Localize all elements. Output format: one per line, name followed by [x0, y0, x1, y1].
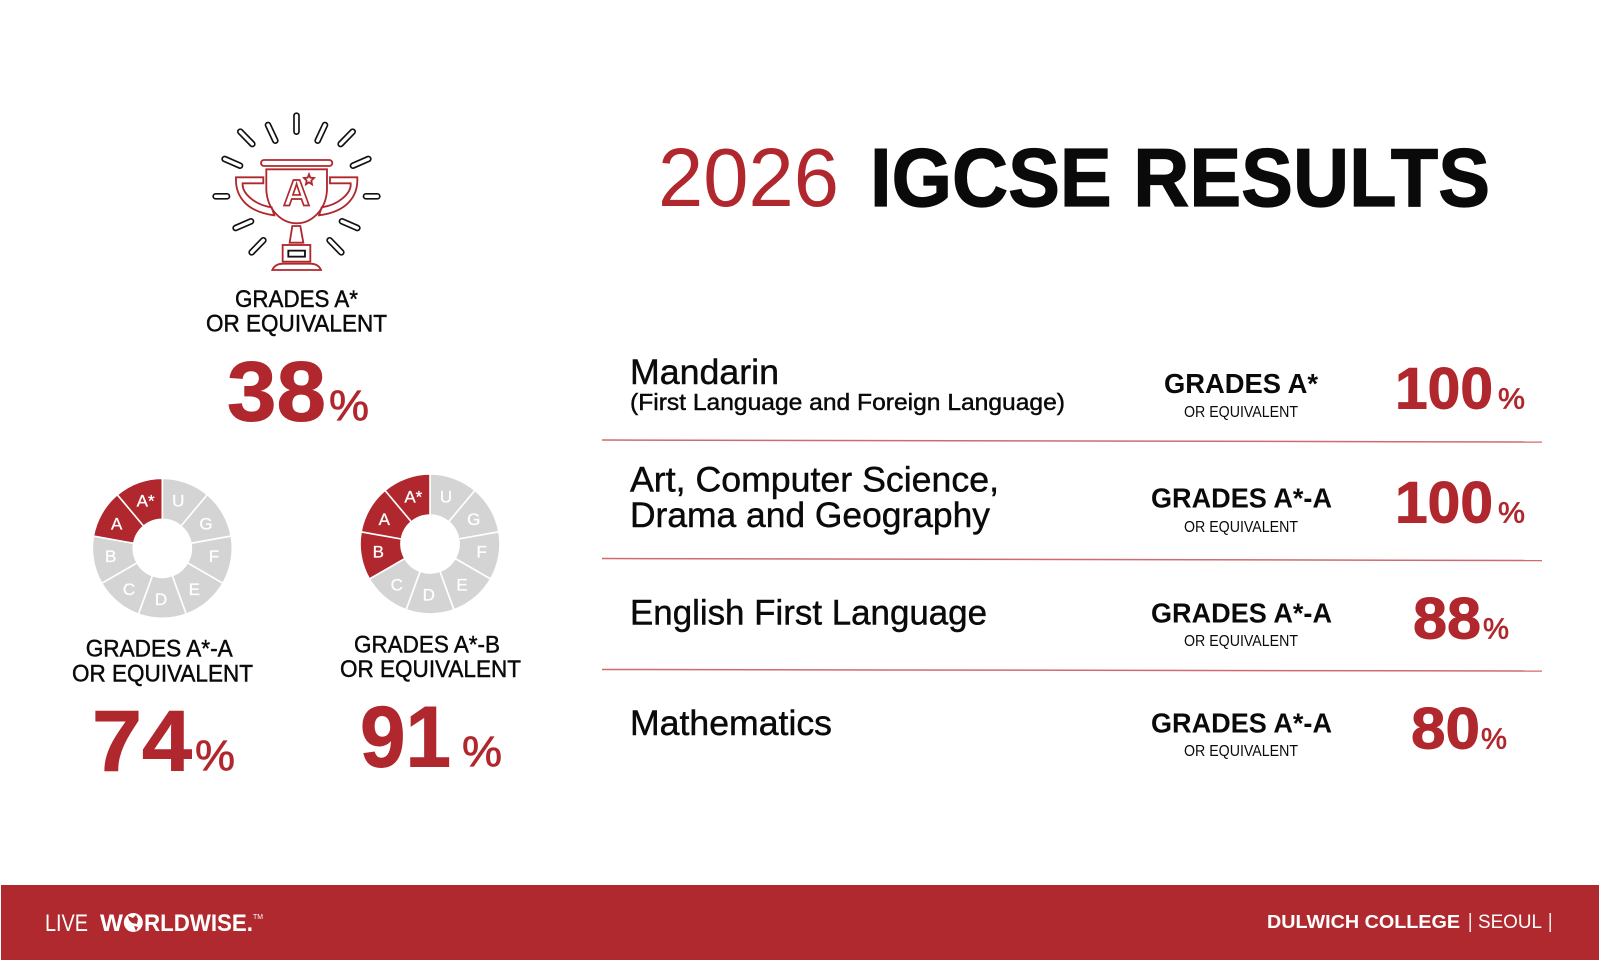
subject row: English First Language: % — [1483, 614, 1509, 646]
subject row: Art, Computer Science, Drama and Geography: Art, Computer Science, — [630, 461, 999, 500]
subject row: English First Language: 88 — [1413, 586, 1481, 652]
donut chart: grades A*-A: B — [105, 547, 116, 566]
footer: Live Worldwise logo: RLDWISE. — [144, 910, 253, 937]
stat: 38%: % — [329, 382, 369, 430]
footer: Live Worldwise logo — [45, 910, 263, 937]
subject row: Mathematics — [630, 696, 1507, 762]
footer: Live Worldwise logo: O — [125, 910, 142, 937]
subject row: Mandarin: OR EQUIVALENT — [1184, 404, 1298, 421]
donut chart: grades A*-A: D — [155, 590, 167, 609]
footer band — [1, 885, 1599, 960]
title: 2026 — [658, 131, 839, 224]
subject row: Mandarin — [630, 353, 1525, 422]
footer: Dulwich College Seoul logo — [1267, 911, 1551, 933]
donut chart: grades A*-A: C — [123, 580, 135, 599]
subject row: English First Language: English First Language — [630, 594, 987, 632]
subject row: English First Language: OR EQUIVALENT — [1184, 633, 1298, 650]
donut chart: grades A*-A: E — [189, 580, 200, 599]
heading: grades A*-A — [72, 636, 253, 688]
donut chart: grades A*-B: D — [423, 586, 435, 605]
subject row: Art, Computer Science, Drama and Geography: % — [1498, 498, 1525, 530]
heading: grades A*: OR EQUIVALENT — [206, 310, 387, 338]
footer: Dulwich College Seoul logo: SEOUL — [1478, 912, 1542, 933]
donut chart: grades A*-B: G — [467, 510, 480, 529]
donut chart: grades A*-A — [92, 478, 232, 618]
donut chart: grades A*-B: U — [440, 487, 452, 506]
subject row: Mathematics: 80 — [1411, 696, 1480, 762]
icon: trophy with rays: A — [283, 172, 310, 214]
donut chart: grades A*-A: F — [209, 547, 219, 566]
heading: grades A* — [206, 286, 387, 338]
subject row: Art, Computer Science, Drama and Geography: OR EQUIVALENT — [1184, 519, 1298, 536]
heading: grades A*-B: GRADES A*-B — [354, 632, 500, 659]
subject row: Art, Computer Science, Drama and Geography — [630, 461, 1525, 536]
donut chart: grades A*-B: A — [379, 510, 391, 529]
stat: 91% — [360, 690, 502, 786]
donut chart: grades A*-A: U — [172, 492, 184, 511]
stat: 91%: 91 — [360, 690, 451, 786]
subject row: Mathematics: OR EQUIVALENT — [1184, 743, 1298, 760]
subject row: English First Language: GRADES A*-A — [1151, 597, 1332, 628]
subject row: Art, Computer Science, Drama and Geography: GRADES A*-A — [1151, 483, 1332, 514]
stat: 91%: % — [462, 729, 502, 777]
subject row: Mathematics: Mathematics — [630, 704, 832, 743]
subject row: English First Language — [630, 586, 1509, 652]
heading: grades A*-A: GRADES A*-A — [86, 636, 233, 663]
footer: Dulwich College Seoul logo: DULWICH COLLEGE — [1267, 911, 1460, 932]
subject row: Mandarin: % — [1498, 384, 1525, 416]
subject row: Mandarin: 100 — [1395, 356, 1493, 422]
heading: grades A*-B — [340, 632, 521, 683]
footer: Live Worldwise logo: W — [100, 910, 123, 937]
stat: 74% — [92, 694, 235, 790]
subject row: Mandarin: (First Language and Foreign Language) — [630, 389, 1065, 415]
donut chart: grades A*-A: G — [199, 514, 213, 533]
heading: grades A*-B: OR EQUIVALENT — [340, 656, 521, 683]
subject row: Mandarin: Mandarin — [630, 353, 779, 392]
donut chart: grades A*-B: A* — [404, 487, 423, 506]
subject row: Mathematics: % — [1481, 724, 1507, 756]
subject row: Mandarin: GRADES A* — [1164, 368, 1318, 399]
stat: 38%: 38 — [227, 344, 326, 438]
donut chart: grades A*-B: C — [391, 576, 403, 595]
footer: Live Worldwise logo: TM — [253, 914, 263, 921]
heading: grades A*-A: OR EQUIVALENT — [72, 660, 253, 688]
stat: 74%: 74 — [92, 694, 192, 790]
donut chart: grades A*-A: A — [111, 514, 123, 533]
donut chart: grades A*-B — [360, 474, 500, 614]
icon: trophy with rays — [216, 116, 377, 270]
footer: Live Worldwise logo: LIVE — [45, 910, 88, 937]
subject row: Art, Computer Science, Drama and Geography: Drama and Geography — [630, 496, 990, 535]
subject row: Art, Computer Science, Drama and Geography: 100 — [1395, 470, 1493, 536]
subject row: Mathematics: GRADES A*-A — [1151, 708, 1332, 739]
donut chart: grades A*-B: E — [456, 576, 468, 595]
title: IGCSE RESULTS — [870, 131, 1490, 224]
stat: 38% — [227, 344, 369, 438]
donut chart: grades A*-B: B — [373, 543, 384, 562]
donut chart: grades A*-A: A* — [137, 492, 155, 511]
heading: grades A*: GRADES A* — [235, 286, 358, 313]
donut chart: grades A*-B: F — [477, 543, 487, 562]
stat: 74%: % — [195, 733, 235, 781]
